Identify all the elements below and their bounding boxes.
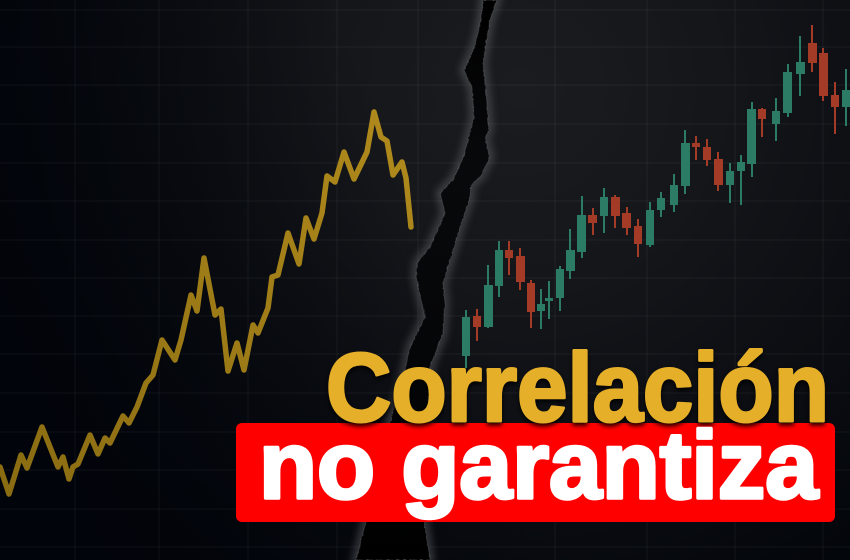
candle 29 [772,98,780,141]
headline: Correlación: Correlación [326,333,829,442]
candle 1 [462,310,470,368]
candle 32 [808,25,817,72]
candle 14 [600,188,608,233]
candle 17 [634,219,642,257]
candle 33 [819,48,828,101]
candle 23 [703,139,711,166]
candle 2 [473,309,481,341]
candle 26 [737,155,745,205]
candle 15 [611,195,620,228]
candle 11 [566,229,575,279]
candle 16 [622,207,631,235]
candle 12 [577,196,586,258]
candle 13 [588,208,597,235]
candle 25 [726,163,734,203]
candle 10 [556,266,564,311]
candle 28 [758,108,766,137]
candle 30 [783,64,792,117]
candle 20 [670,174,678,212]
candle 6 [516,248,525,290]
candle 3 [484,265,493,328]
candle 4 [495,241,503,297]
gold line chart [0,112,411,494]
candle 21 [681,130,690,194]
candle 24 [714,152,723,191]
red banner [236,423,835,522]
candle 9 [545,281,553,319]
candle 5 [505,241,513,275]
candlestick chart [462,25,850,368]
candle 35 [842,69,850,126]
candle 8 [537,289,545,329]
candle 22 [692,136,700,160]
candle 18 [646,202,654,247]
candle 7 [527,280,535,328]
candle 34 [831,82,839,134]
banner text: no garantiza: no garantiza [259,412,819,519]
candle 27 [747,102,756,177]
candle 19 [657,192,665,217]
candle 31 [796,36,805,96]
torn crack [356,0,497,560]
